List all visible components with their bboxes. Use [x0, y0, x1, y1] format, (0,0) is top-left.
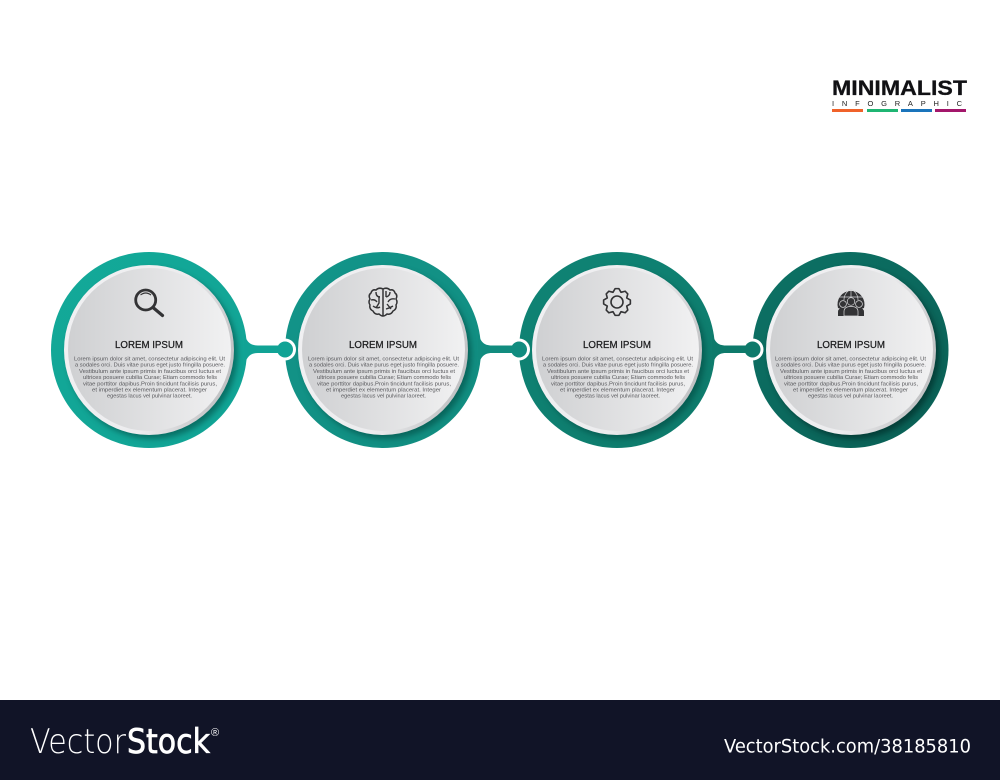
step 4 body text: vitae porttitor dapibus.Proin tincidunt facilisis purus, [784, 381, 918, 387]
icon: gear [604, 289, 630, 315]
step 1 body text: ultrices posuere cubilia Curae; Etiam commodo felis [83, 375, 217, 381]
step 3 body text: Vestibulum ante ipsum primis in faucibus orci luctus et [547, 369, 689, 375]
step 3 body text: vitae porttitor dapibus.Proin tincidunt facilisis purus, [551, 381, 685, 387]
step 3 body text: a sodales orci. Duis vitae purus eget justo fringilla posuere. [543, 363, 693, 369]
step 4 disc [766, 265, 940, 439]
step 3 body text: Lorem ipsum dolor sit amet, consectetur adipiscing elit. Ut [542, 356, 693, 362]
logo subtitle: INFOGRAPHIC [832, 99, 963, 108]
footer wordmark: Vector [30, 722, 126, 762]
step 2 body text [308, 356, 459, 400]
step 1 body text: vitae porttitor dapibus.Proin tincidunt facilisis purus, [83, 381, 217, 387]
step 4 body text: a sodales orci. Duis vitae purus eget justo fringilla posuere. [776, 363, 926, 369]
step 1 body text: et imperdiet ex elementum placerat. Integer [92, 388, 207, 394]
step 4 body text: ultrices posuere cubilia Curae; Etiam commodo felis [784, 375, 918, 381]
step 1 ring [51, 252, 247, 448]
step 2 ring [285, 252, 481, 448]
step 1 body text: egestas lacus vel pulvinar laoreet. [107, 394, 192, 400]
step 4 body text: Lorem ipsum dolor sit amet, consectetur adipiscing elit. Ut [775, 356, 926, 362]
step 2 disc [298, 265, 472, 439]
step 2 body text: vitae porttitor dapibus.Proin tincidunt facilisis purus, [317, 381, 451, 387]
step 2 body text: egestas lacus vel pulvinar laoreet. [341, 394, 426, 400]
step 4 body text: et imperdiet ex elementum placerat. Integer [793, 388, 908, 394]
step 2 body text: ultrices posuere cubilia Curae; Etiam commodo felis [317, 375, 451, 381]
step 2 body text: Vestibulum ante ipsum primis in faucibus orci luctus et [313, 369, 455, 375]
step 4 body text: Vestibulum ante ipsum primis in faucibus orci luctus et [780, 369, 922, 375]
step 3 panel [519, 252, 715, 448]
logo: minimalist infographic [832, 76, 967, 112]
logo title: MINIMALIST [832, 76, 967, 100]
step 3 heading: LOREM IPSUM [583, 340, 651, 351]
step 3 body text: et imperdiet ex elementum placerat. Integer [560, 388, 675, 394]
step 2 panel [285, 252, 481, 448]
step 3 body text [542, 356, 693, 400]
step 2 heading: LOREM IPSUM [349, 340, 417, 351]
step 1 body text: Lorem ipsum dolor sit amet, consectetur adipiscing elit. Ut [74, 356, 225, 362]
icon: global community [838, 289, 865, 316]
step 1 panel [51, 252, 247, 448]
step 1 heading: LOREM IPSUM [115, 340, 183, 351]
step 3 body text: ultrices posuere cubilia Curae; Etiam commodo felis [551, 375, 685, 381]
connector 2 to 3 [478, 334, 530, 365]
step 4 ring [752, 252, 948, 448]
footer image id: VectorStock.com/38185810 [724, 736, 971, 758]
step 3 body text: egestas lacus vel pulvinar laoreet. [575, 394, 660, 400]
step 4 panel [752, 252, 948, 448]
footer bar [0, 700, 1000, 780]
icon: magnifying glass [136, 290, 162, 316]
step 4 body text [775, 356, 926, 400]
registered mark: ® [211, 727, 219, 739]
logo colour bars [832, 109, 966, 112]
connector 3 to 4 [712, 334, 764, 365]
footer wordmark: Stock [127, 722, 210, 762]
step 1 body text: a sodales orci. Duis vitae purus eget justo fringilla posuere. [75, 363, 225, 369]
step 2 body text: Lorem ipsum dolor sit amet, consectetur adipiscing elit. Ut [308, 356, 459, 362]
step 4 body text: egestas lacus vel pulvinar laoreet. [808, 394, 893, 400]
connector 1 to 2 [244, 334, 296, 365]
step 2 body text: a sodales orci. Duis vitae purus eget justo fringilla posuere. [309, 363, 459, 369]
step 1 body text: Vestibulum ante ipsum primis in faucibus orci luctus et [79, 369, 221, 375]
step 1 disc [64, 265, 238, 439]
step 3 disc [532, 265, 706, 439]
step 3 ring [519, 252, 715, 448]
footer wordmark [30, 722, 210, 762]
step 1 body text [74, 356, 225, 400]
step 2 body text: et imperdiet ex elementum placerat. Integer [326, 388, 441, 394]
step 4 heading: LOREM IPSUM [817, 340, 885, 351]
icon: brain [369, 288, 397, 316]
